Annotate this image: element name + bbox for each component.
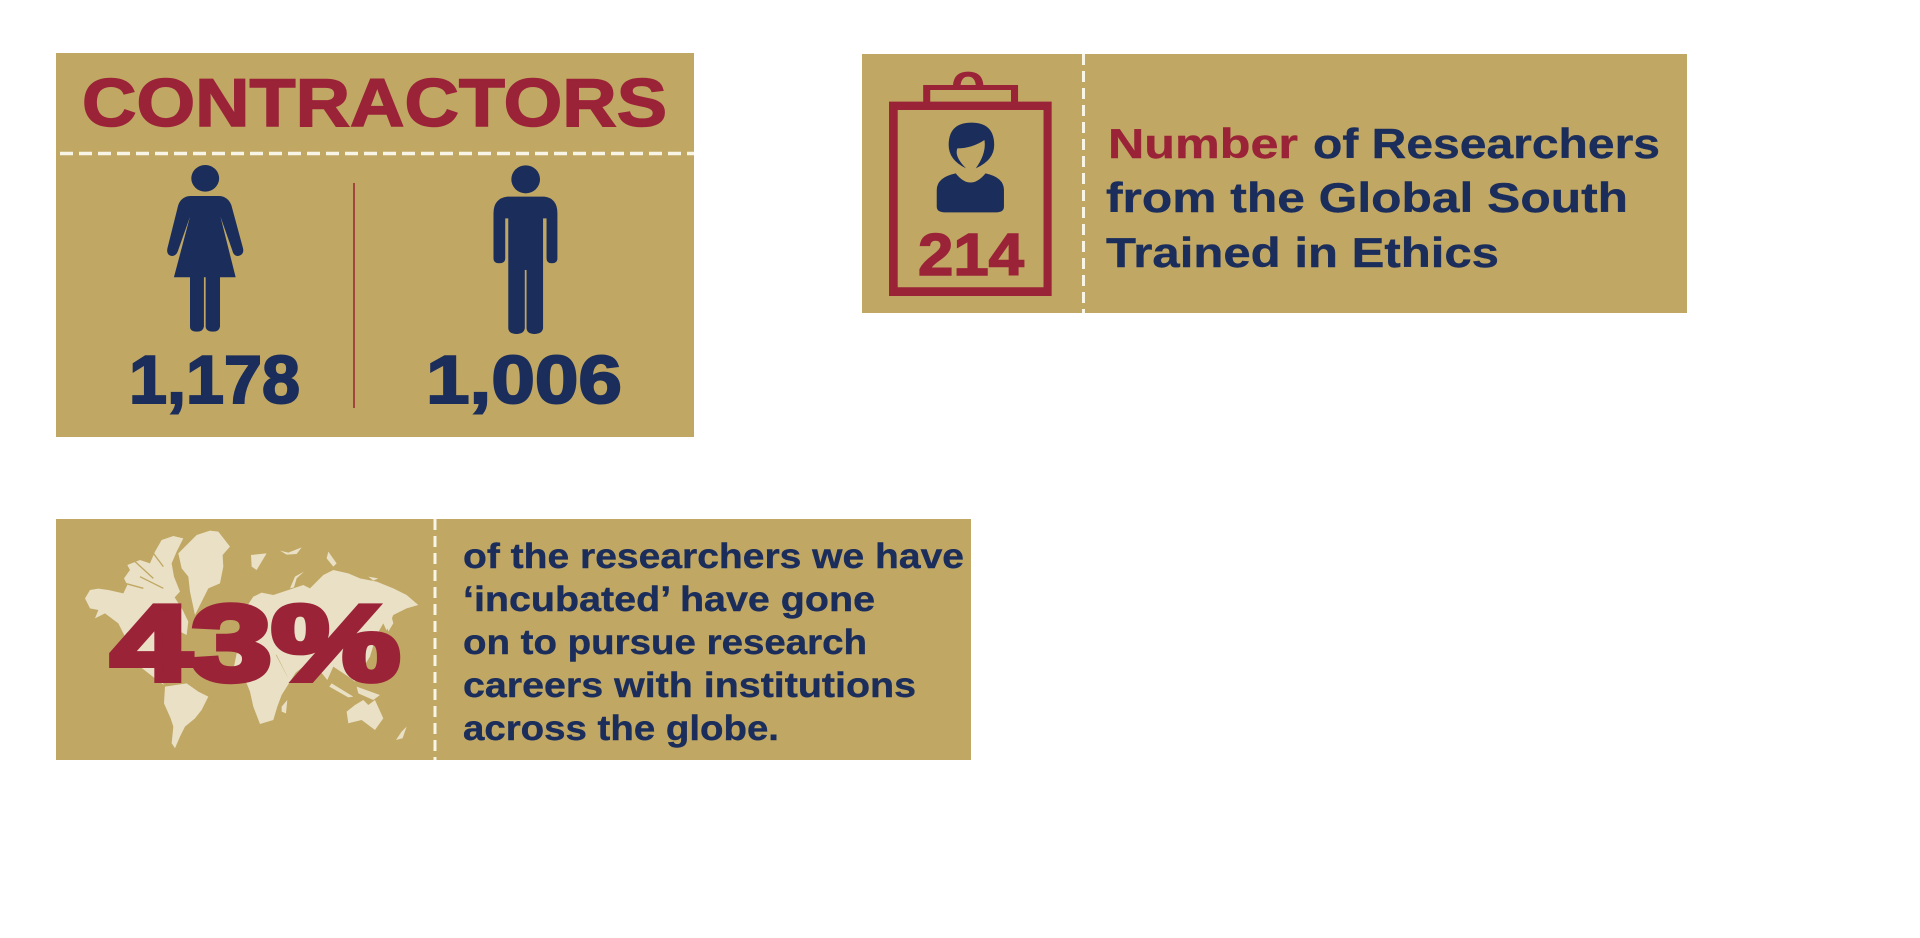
text: number of researchers: from the Global South	[1106, 174, 1628, 221]
number: 214: 214	[918, 222, 1024, 288]
icon: world map	[85, 531, 418, 748]
text: number of researchers	[1106, 120, 1660, 276]
panel: researchers trained in ethics	[862, 54, 1687, 313]
icon: woman	[167, 165, 243, 332]
text: researchers incubated: on to pursue research	[463, 623, 867, 662]
number: women contractors: 1,178	[129, 342, 300, 418]
number: men contractors: 1,006	[426, 342, 622, 418]
text: number of researchers: Number	[1108, 120, 1298, 167]
text: researchers incubated: ‘incubated’ have gone	[463, 580, 875, 619]
text: number of researchers: of Researchers	[1313, 120, 1660, 167]
icon: man	[493, 165, 557, 334]
panel: 43 percent researchers	[56, 519, 971, 760]
panel: contractors	[56, 53, 694, 437]
heading: contractors: CONTRACTORS	[82, 65, 667, 141]
text: researchers incubated: careers with institutions	[463, 666, 916, 705]
text: researchers incubated	[463, 537, 964, 748]
text: number of researchers: Trained in Ethics	[1106, 229, 1499, 276]
icon: clipboard with person	[889, 72, 1052, 296]
text: researchers incubated: across the globe.	[463, 709, 779, 748]
text: researchers incubated: of the researchers we have	[463, 537, 964, 576]
number: 43 percent: 43%	[111, 583, 400, 703]
